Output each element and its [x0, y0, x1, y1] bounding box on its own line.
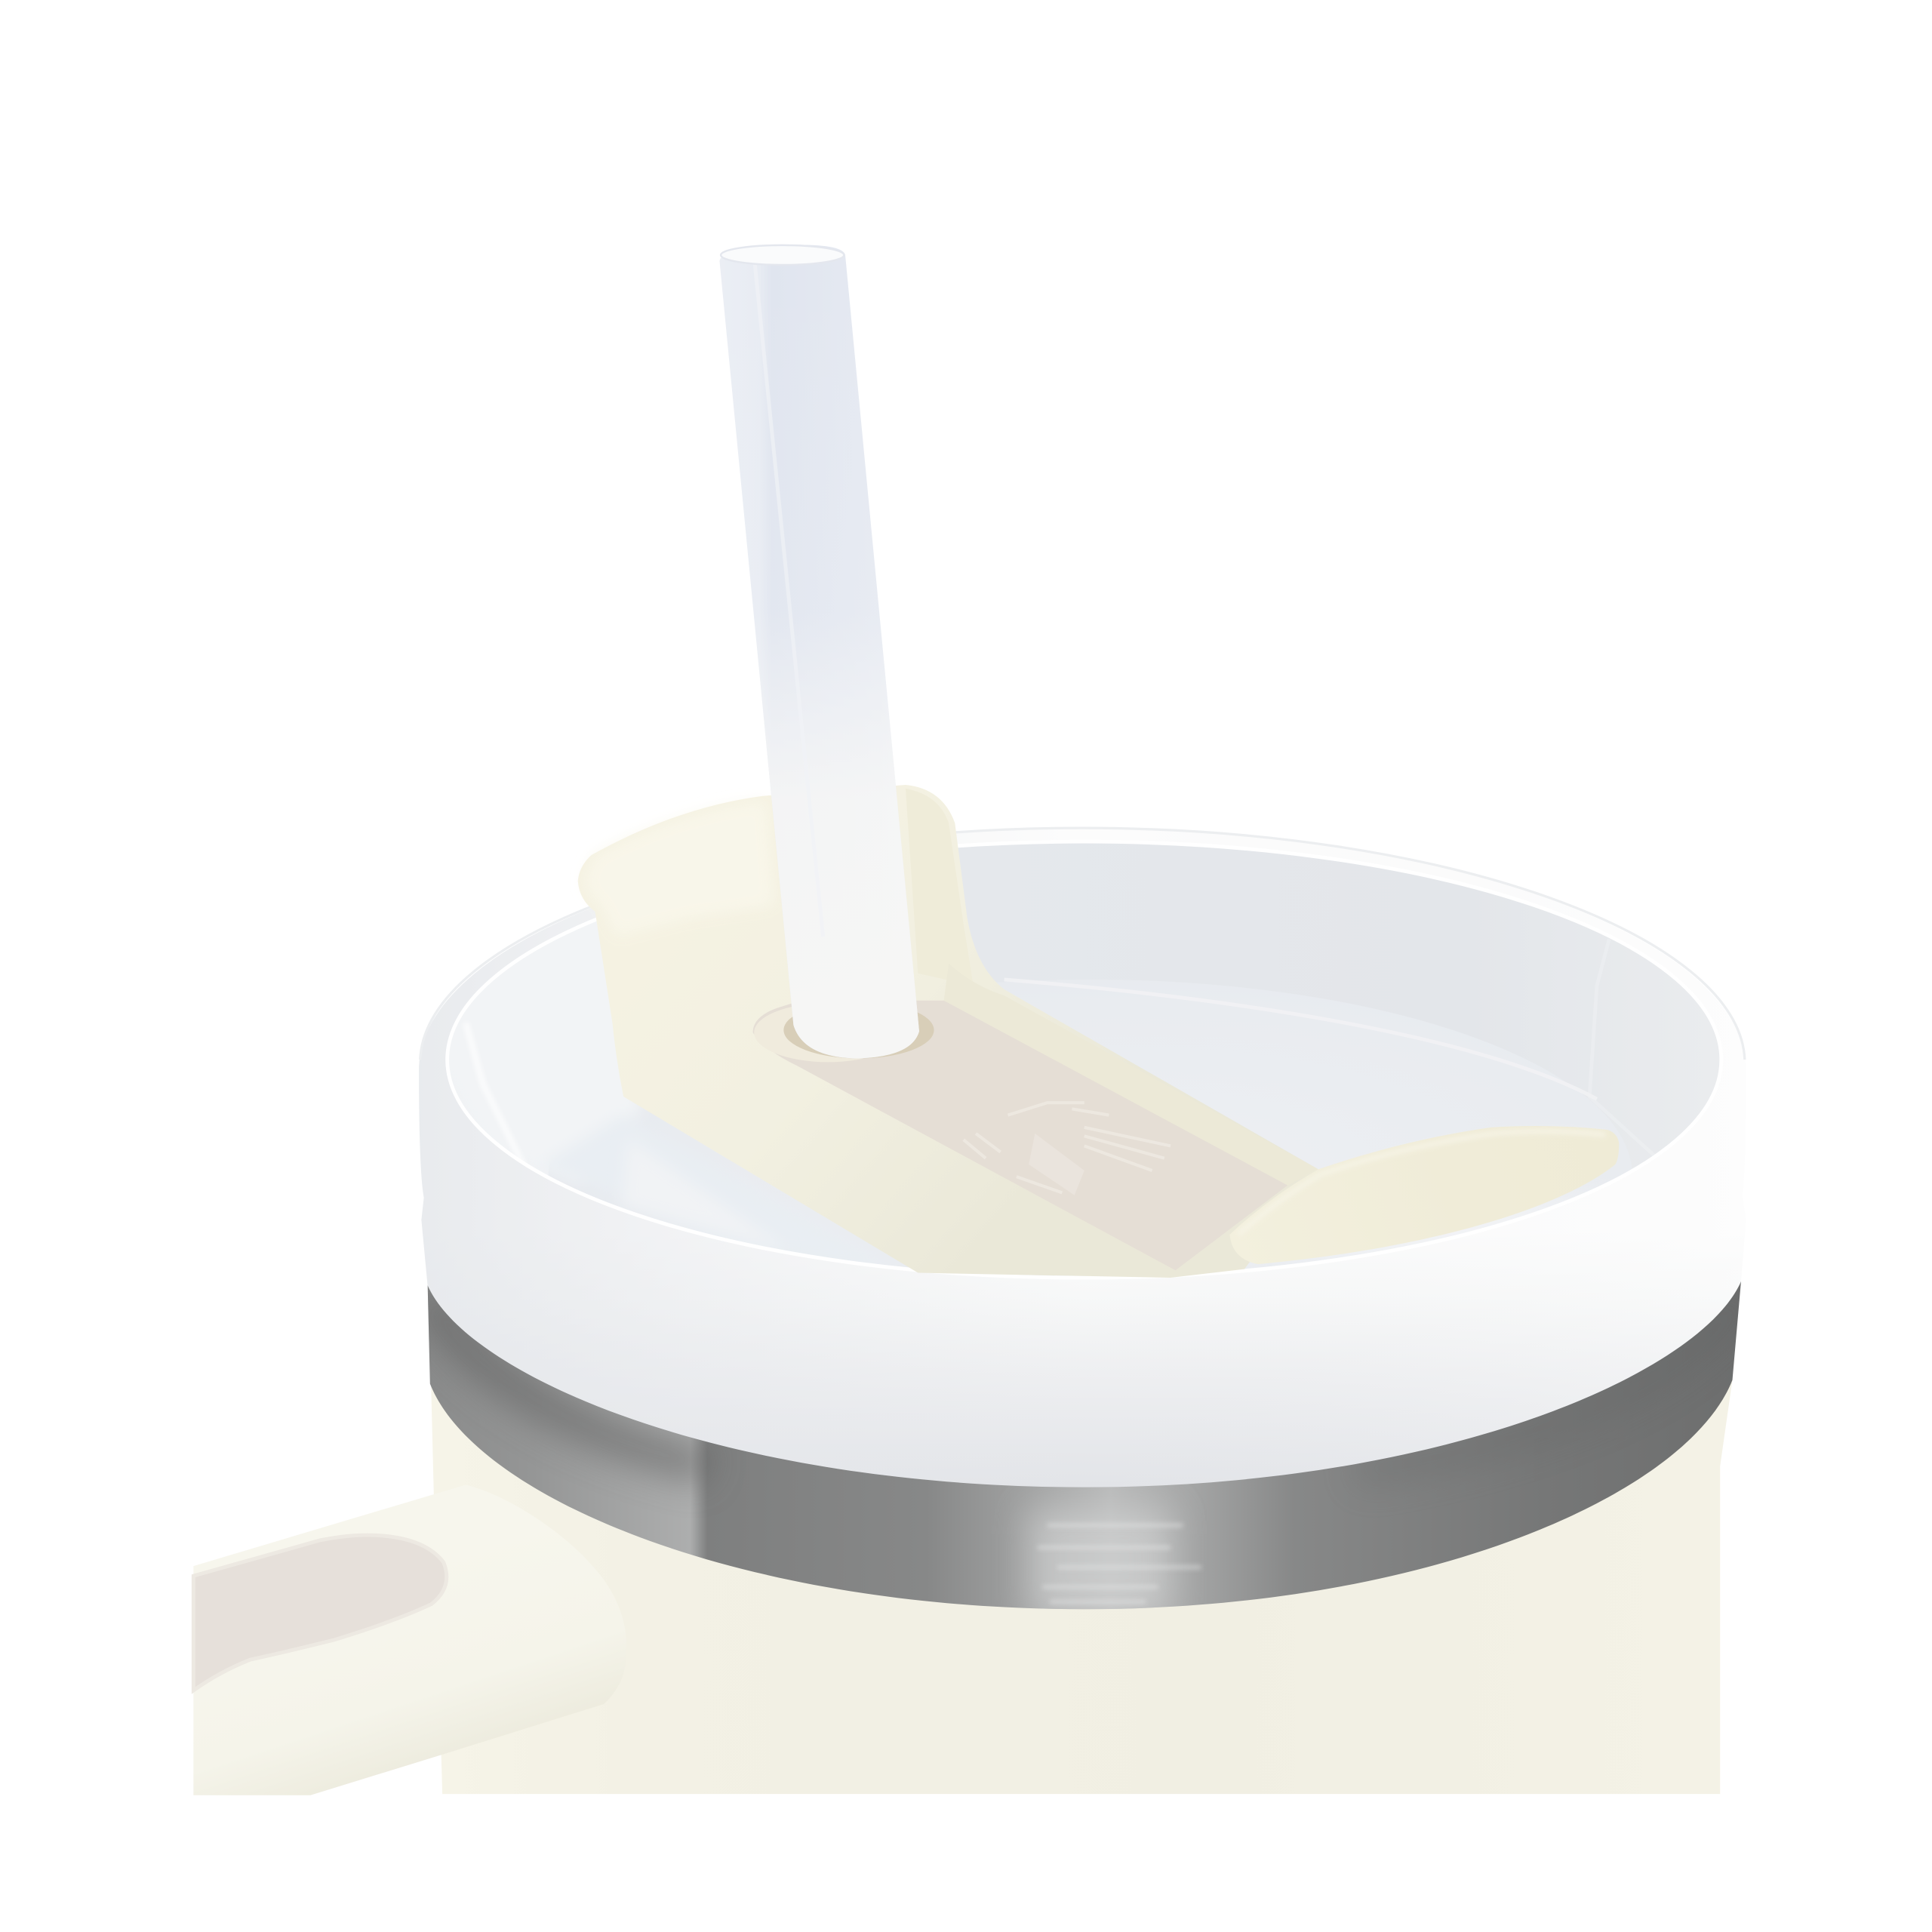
- straw: [719, 245, 919, 1058]
- lid floor: [549, 980, 1632, 1374]
- collar around straw hole: [754, 1003, 902, 1062]
- white lid outer: [419, 828, 1746, 1487]
- left wall light patch: [552, 1079, 632, 1153]
- steel collar band: [428, 1281, 1741, 1620]
- illustration: tumbler lid with straw: [192, 245, 1746, 1795]
- handle grip pill: [193, 1535, 447, 1690]
- flap right strip: [944, 964, 1318, 1186]
- tumbler body: [430, 1343, 1734, 1794]
- front floor tint: [568, 1140, 599, 1167]
- handle: [193, 1484, 626, 1795]
- straw hole: [783, 1001, 934, 1058]
- straw mouth: [721, 245, 844, 265]
- flap upper lobe highlight: [585, 801, 774, 937]
- right flap tab: [1229, 1126, 1619, 1264]
- flip flap arm: [578, 785, 1318, 1278]
- lid cavity: [445, 844, 1719, 1278]
- rim highlight: [448, 841, 1721, 1278]
- embossed logo: [964, 1103, 1171, 1195]
- beige insert: [753, 1001, 1287, 1270]
